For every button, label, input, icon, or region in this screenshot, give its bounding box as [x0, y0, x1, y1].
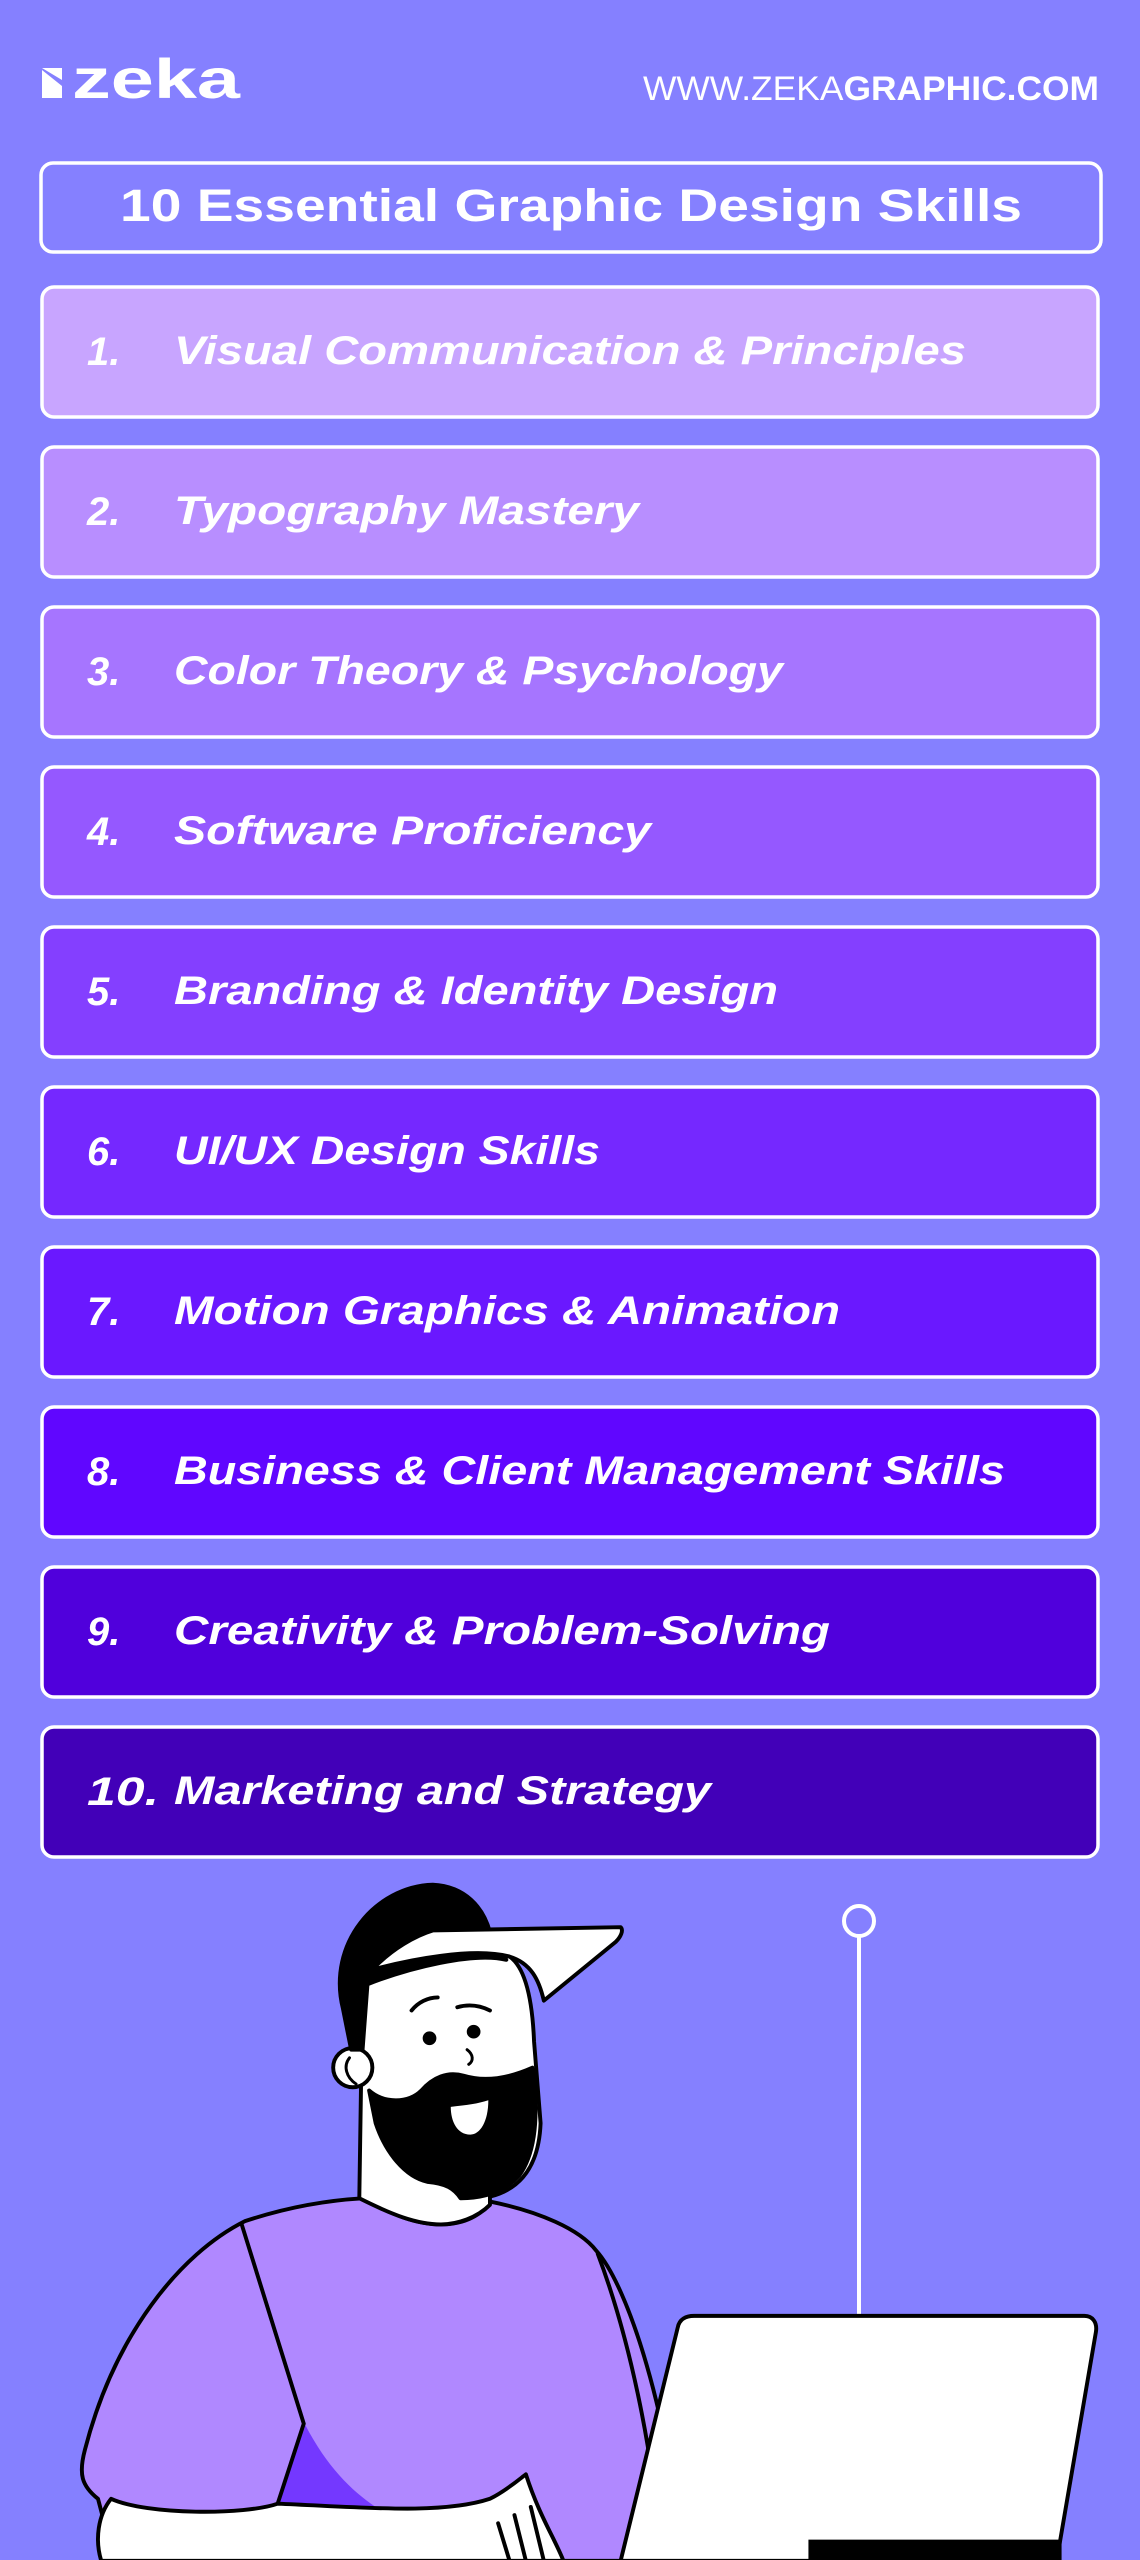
website url: WWW.ZEKAGRAPHIC.COM	[643, 70, 1099, 108]
skill item 5	[42, 927, 1098, 1057]
skill item 9: Creativity & Problem-Solving	[174, 1609, 830, 1653]
skill item 9	[42, 1567, 1098, 1697]
skill item 2: Typography Mastery	[174, 489, 641, 533]
arm and hand	[98, 2474, 563, 2560]
skill item 2	[42, 447, 1098, 577]
antenna line with circle	[844, 1906, 874, 2316]
neck and face	[333, 1953, 541, 2224]
skill item 9: 9.	[87, 1610, 120, 1654]
skill item 3: 3.	[87, 650, 120, 694]
skill item 3	[42, 607, 1098, 737]
cap	[340, 1885, 622, 2050]
skill item 8: 8.	[87, 1450, 120, 1494]
skill item 6: UI/UX Design Skills	[174, 1129, 600, 1173]
skill item 5: 5.	[87, 970, 120, 1014]
skill item 10: 10.	[87, 1770, 159, 1814]
skill item 4: 4.	[86, 810, 120, 854]
illustration: designer with laptop	[82, 1885, 1096, 2560]
skill item 8	[42, 1407, 1098, 1537]
skill item 6: 6.	[87, 1130, 120, 1174]
skill item 10	[42, 1727, 1098, 1857]
skill item 1	[42, 287, 1098, 417]
laptop	[621, 2316, 1096, 2560]
eyes and brows	[412, 1997, 490, 2064]
beard	[369, 2068, 536, 2198]
skill item 3: Color Theory & Psychology	[174, 649, 785, 693]
skill item 8: Business & Client Management Skills	[174, 1449, 1005, 1493]
title box	[41, 163, 1101, 252]
skill item 7: 7.	[87, 1290, 120, 1334]
skill item 10: Marketing and Strategy	[174, 1769, 713, 1813]
skill item 4: Software Proficiency	[174, 809, 653, 853]
skill item 7: Motion Graphics & Animation	[174, 1289, 840, 1333]
shirt	[82, 2198, 683, 2560]
logo: zeka	[42, 47, 241, 110]
logo: zeka: zeka	[72, 47, 241, 110]
skill item 1: Visual Communication & Principles	[174, 329, 966, 373]
skill item 1: 1.	[87, 330, 120, 374]
title box: 10 Essential Graphic Design Skills	[120, 180, 1022, 231]
skill item 7	[42, 1247, 1098, 1377]
skill item 4	[42, 767, 1098, 897]
skill item 6	[42, 1087, 1098, 1217]
skill item 5: Branding & Identity Design	[174, 969, 778, 1013]
skill item 2: 2.	[86, 490, 120, 534]
